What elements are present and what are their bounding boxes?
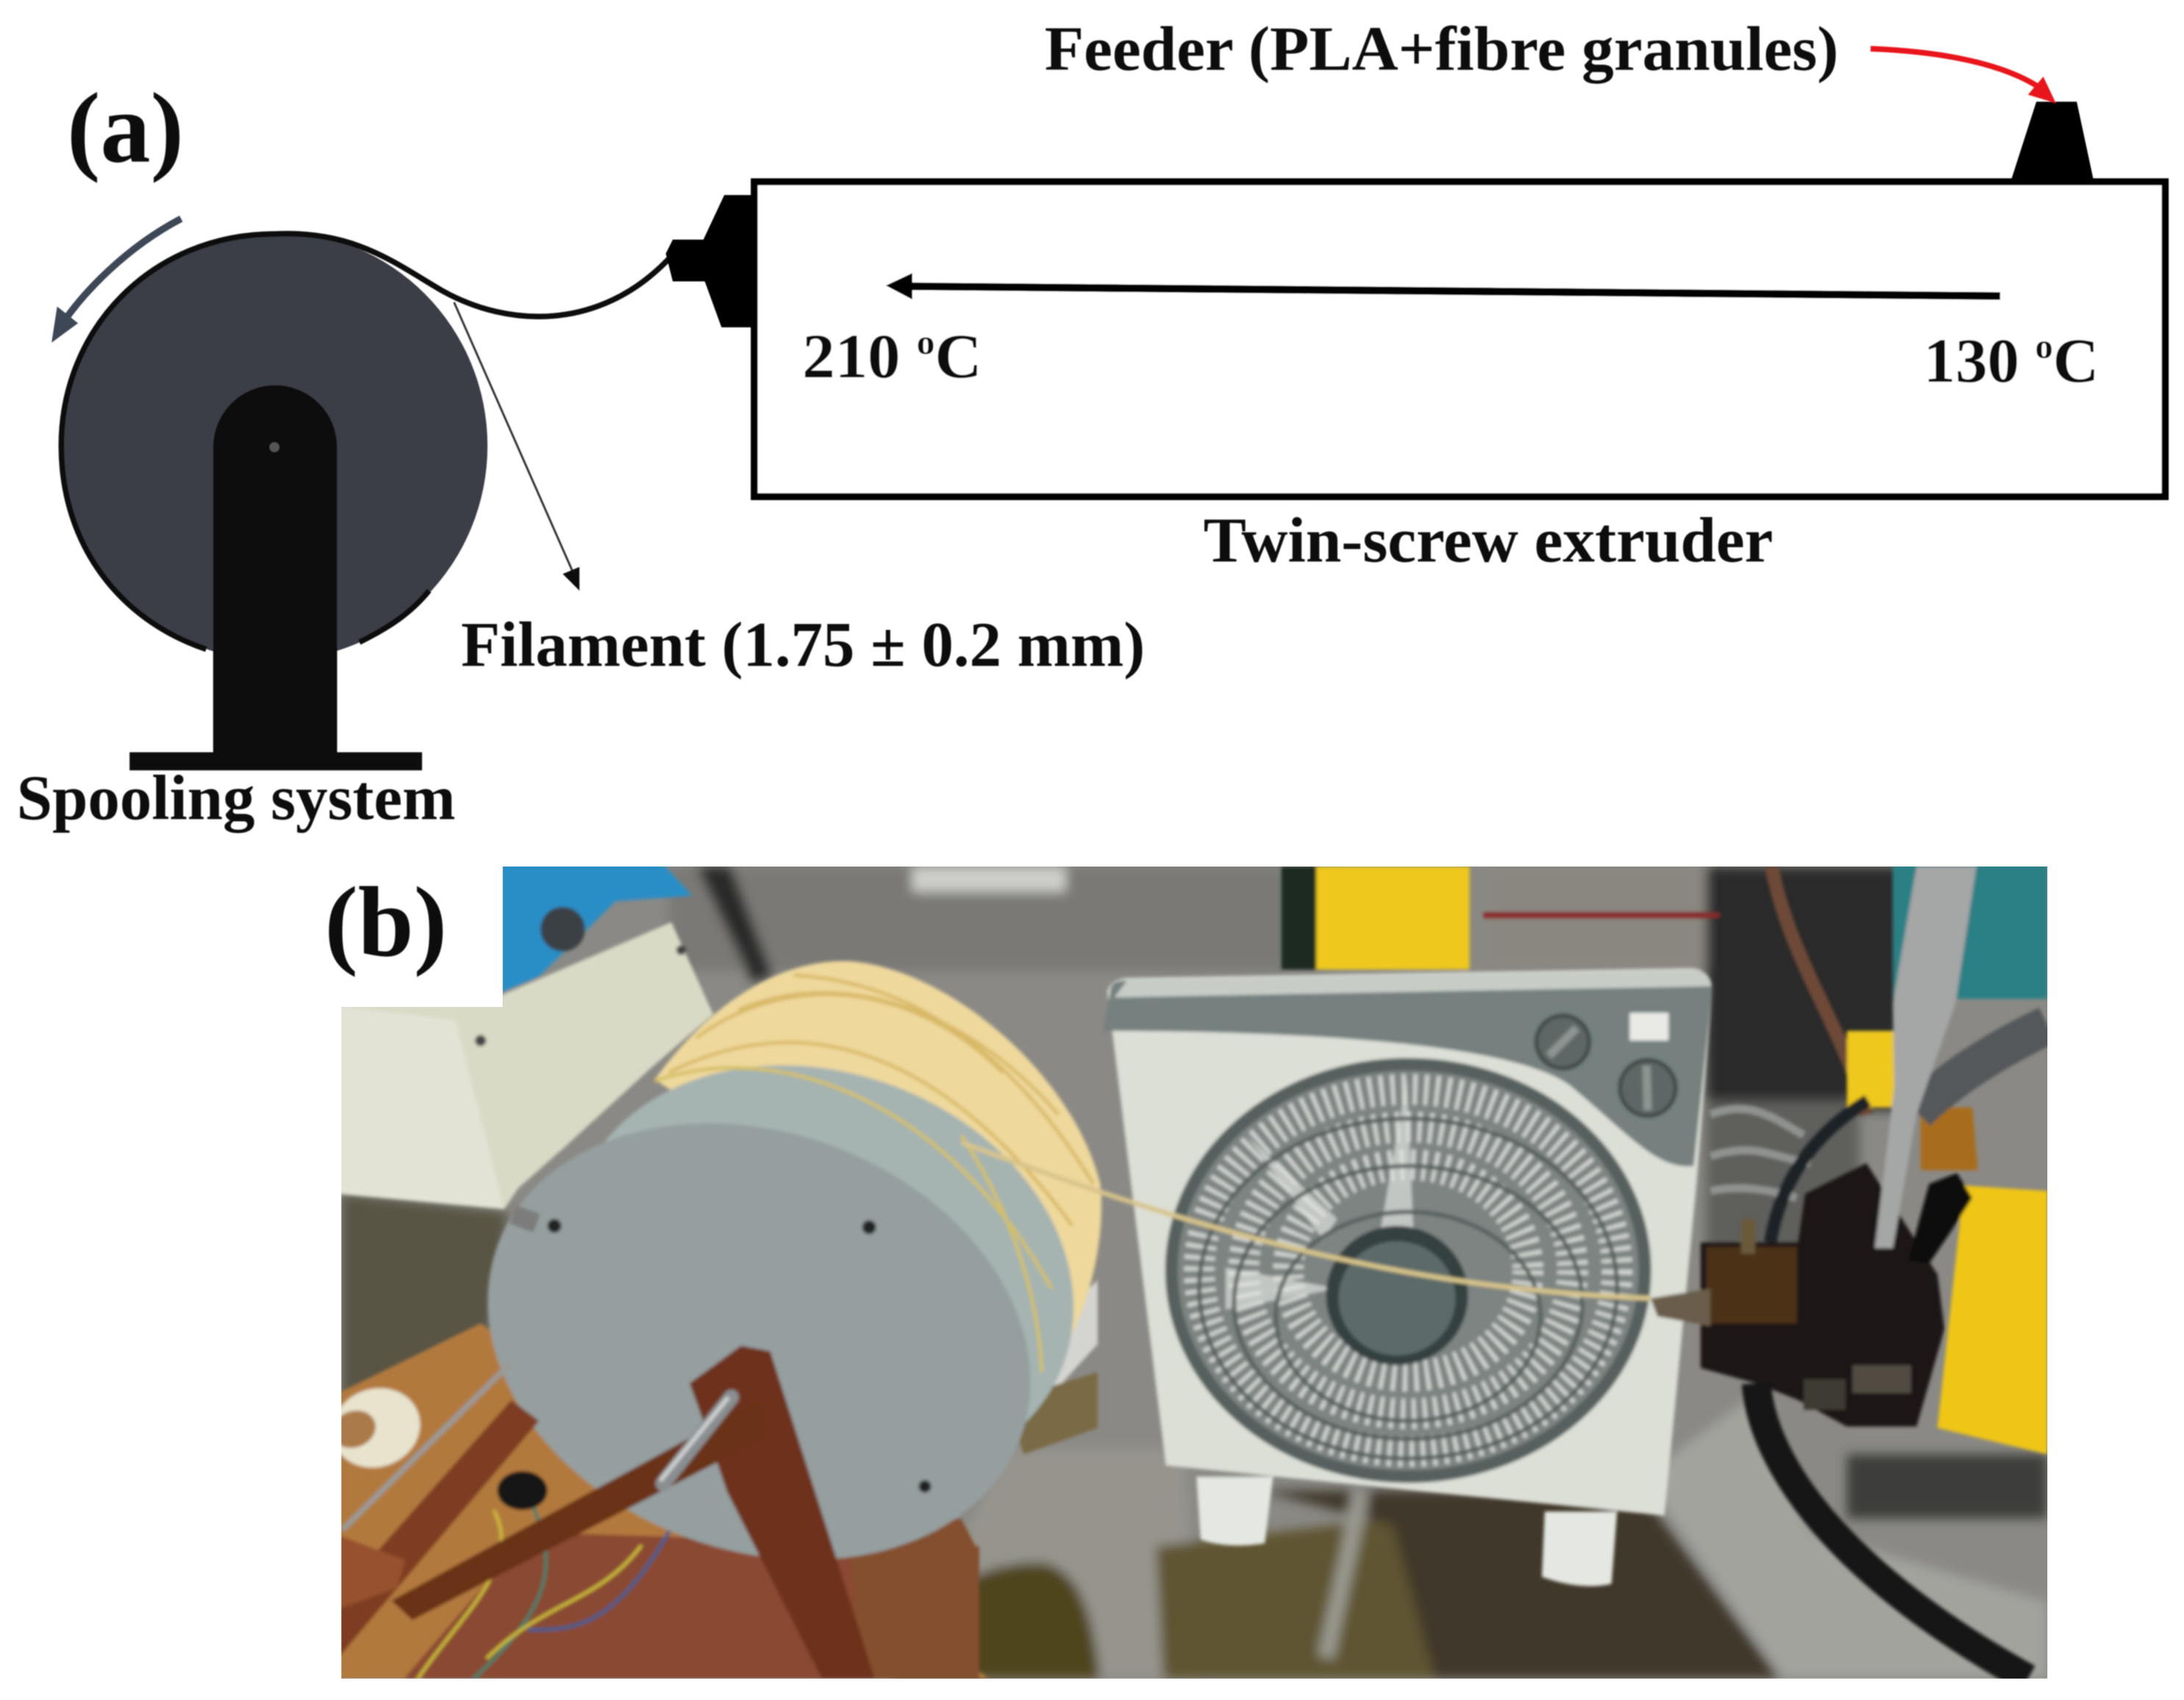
hydraulic hose [1756,1383,2028,1679]
blue machine [500,862,692,993]
panel: (a) schematic diagram [17,15,2165,833]
arrow: feeder pointer [1871,49,2056,103]
yellow machine guard [1316,867,1470,969]
icon: feeder hopper [2011,101,2094,180]
yellow filament coil [655,961,1102,1379]
label: (a): (a) [67,72,184,184]
label: filament diameter: Filament (1.75 ± 0.2 mm) [461,609,1145,680]
label: 130 C: o [2036,328,2053,366]
filament line in photo [961,1142,1650,1298]
twin-screw extruder box [754,182,2165,497]
steel rod [1875,867,1977,1248]
wood table [339,1324,989,1679]
icon: spool reel [61,232,487,770]
label: twin-screw extruder: Twin-screw extruder [1204,504,1773,575]
icon: extruder nozzle [666,195,753,327]
fan grille [1171,1064,1645,1477]
arrow: extrusion direction [886,273,2000,300]
handle [1908,1173,1972,1263]
label: feeder: Feeder (PLA+fibre granules) [1045,15,1839,84]
label: (b): (b) [325,866,447,978]
masking tape roll [341,1385,423,1471]
panel: (b) photo of the spooling setup [321,862,2047,1679]
label: spooling system: Spooling system [17,761,456,833]
fan knobs [1537,1016,1675,1116]
label: 210 C: 210 [802,323,897,392]
label: 210 C: o [916,323,935,362]
arrow: spool rotation [51,219,181,342]
label: 130 C: 130 [1924,326,2017,395]
arrow: filament pointer [454,302,580,591]
extruder die block [1700,1163,1944,1427]
yellow extruder housing [1937,1186,2047,1455]
fan feet [1196,1477,1273,1546]
wooden stand [689,1346,874,1679]
fan hub [1326,1226,1468,1365]
filament strand [274,234,669,317]
grey drum band [605,1064,1076,1424]
steel shaft [663,1397,731,1484]
label: 130 C: C [2053,326,2099,395]
spool disc face [486,1123,1030,1561]
foil tray [1052,1280,1099,1388]
label: 210 C: C [935,323,982,392]
hoses behind extruder [1711,1109,1811,1198]
wires [418,1498,669,1679]
desk fan body [1107,968,1712,1516]
cream machine [339,922,713,1209]
